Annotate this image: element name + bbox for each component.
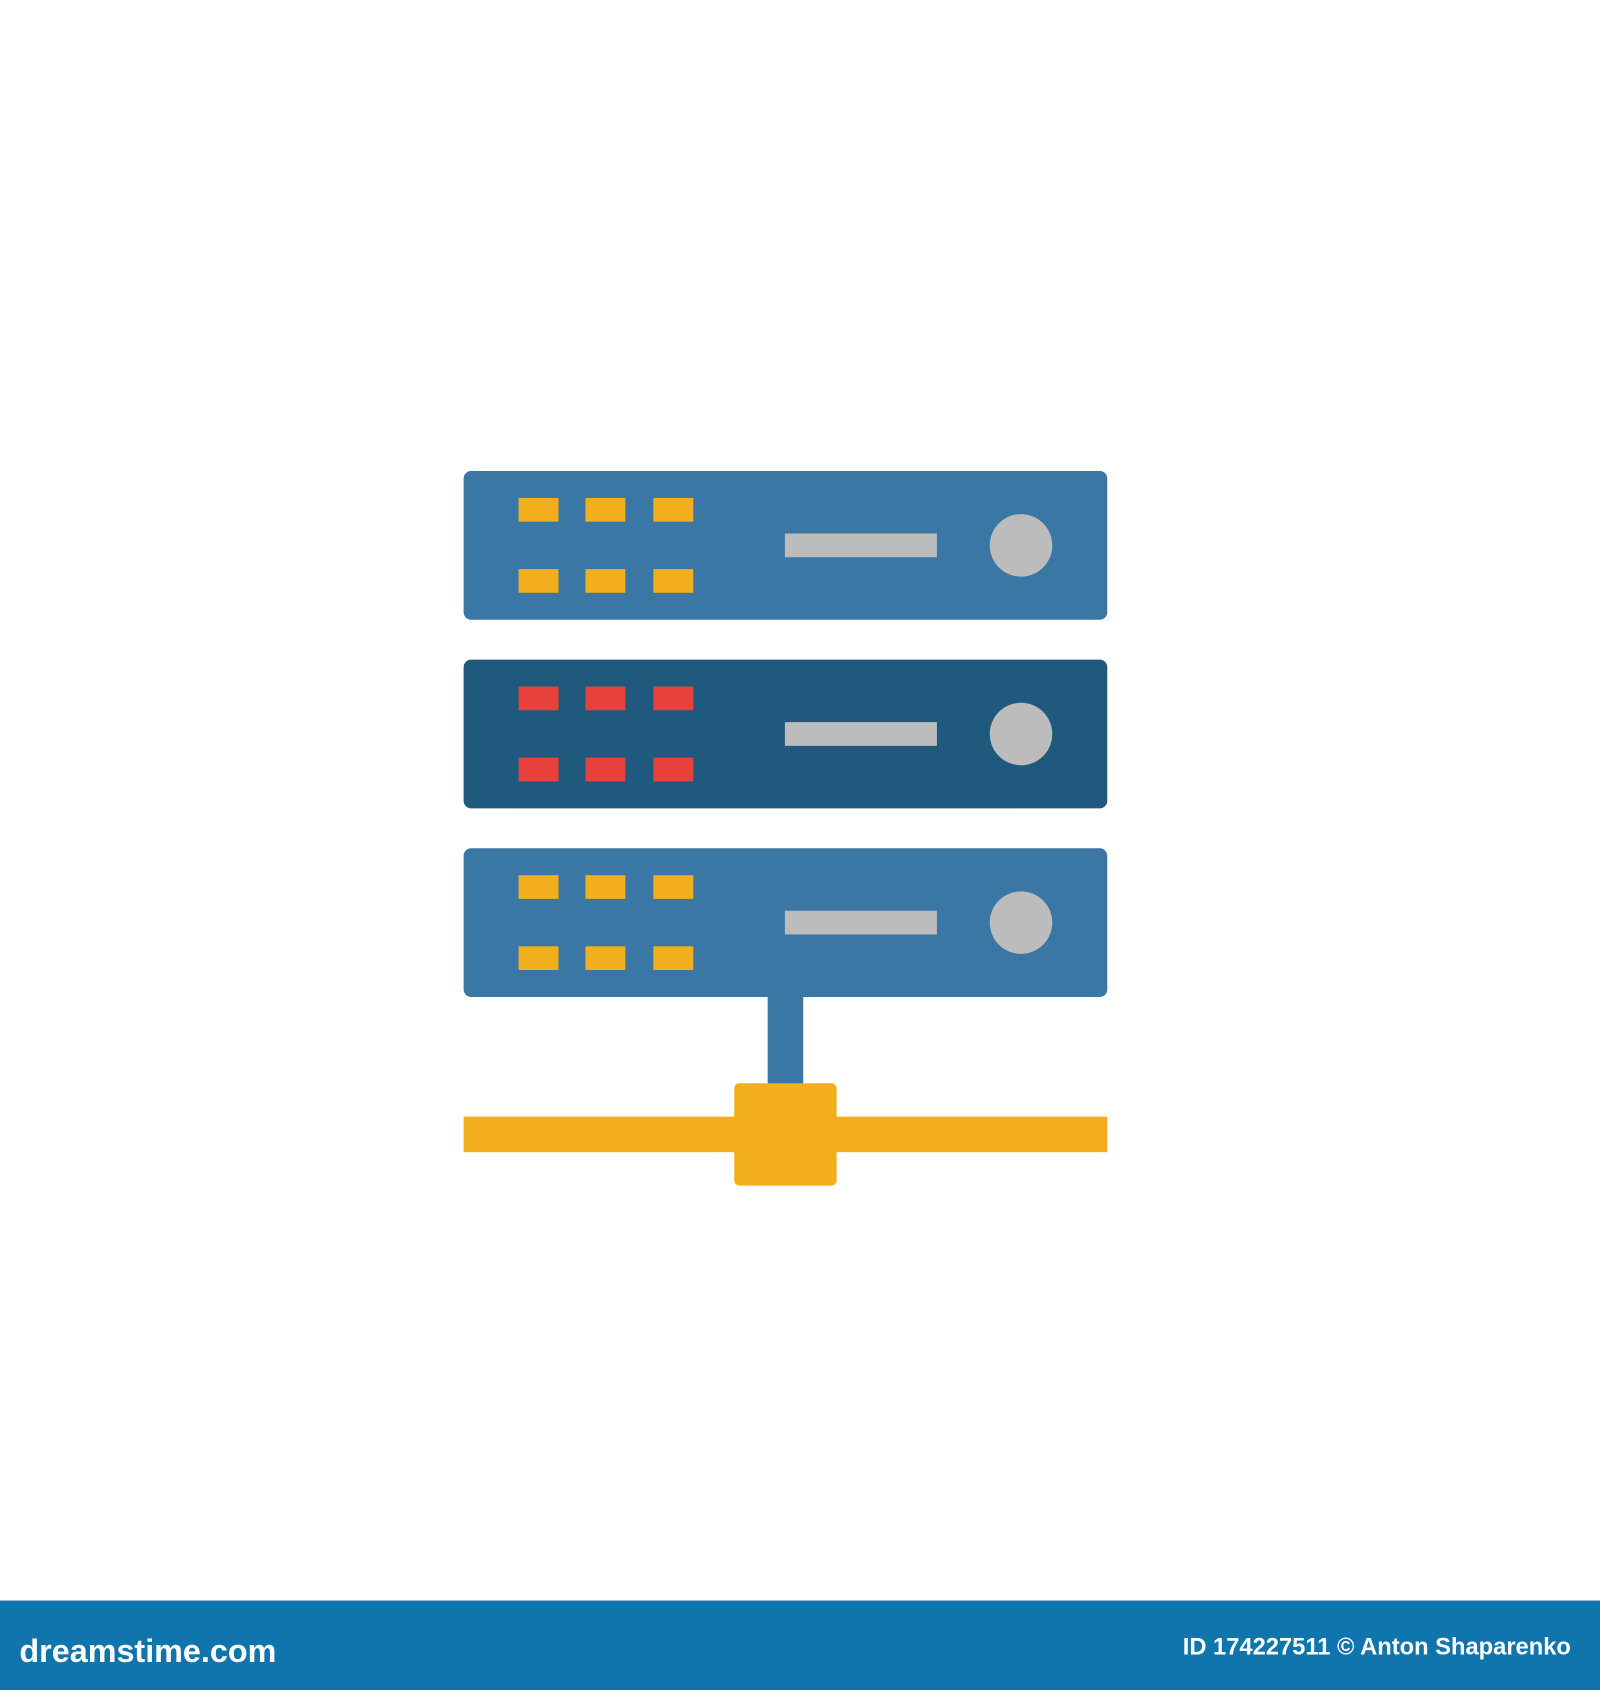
footer bar <box>0 1601 1600 1690</box>
footer: credit: ID 174227511 © Anton Shaparenko <box>1183 1634 1571 1660</box>
network connector <box>464 997 1107 1186</box>
server unit: bottom <box>464 848 1107 997</box>
footer: site name: dreamstime.com <box>19 1633 276 1669</box>
icon: server stack <box>464 471 1107 1186</box>
server unit: top <box>464 471 1107 620</box>
server unit: middle <box>464 660 1107 808</box>
